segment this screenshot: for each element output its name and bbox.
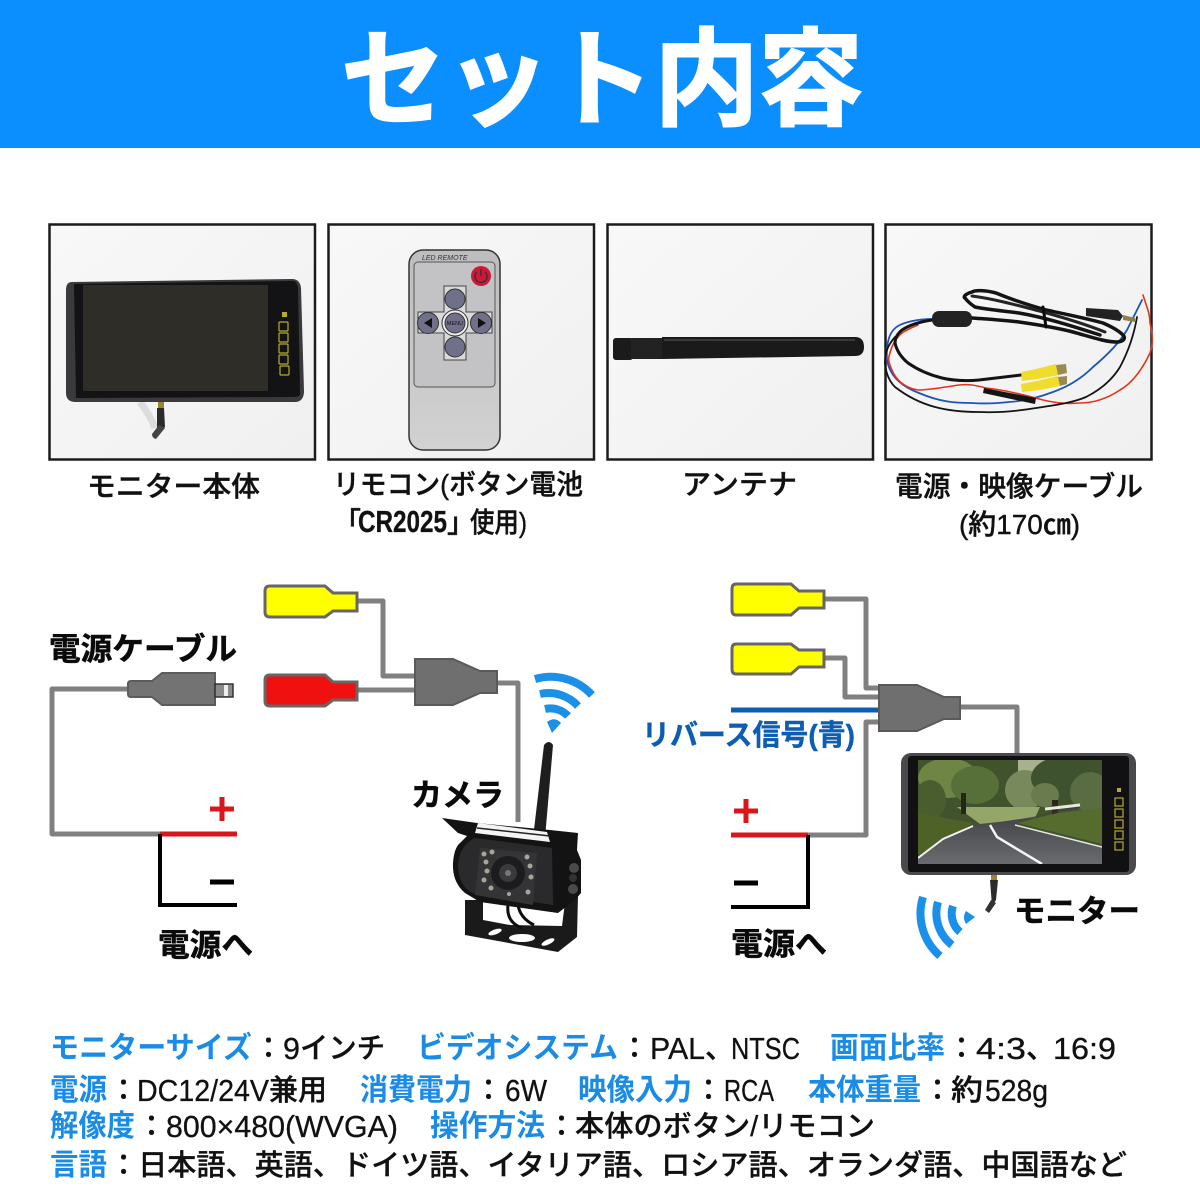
power plug bbox=[128, 673, 233, 705]
spec line 1: PAL bbox=[650, 1031, 705, 1066]
spec line 2: DC12/24V bbox=[137, 1073, 269, 1108]
title banner bbox=[0, 0, 1200, 148]
yellow RCA plug 2 bbox=[732, 644, 824, 674]
spec line 1: モニターサイズ bbox=[50, 1031, 252, 1065]
spec line 2: 本体重量 bbox=[808, 1074, 921, 1107]
icon: cable photo bbox=[885, 291, 1152, 412]
yellow RCA plug bbox=[265, 586, 357, 617]
spec line 1: ： bbox=[620, 1033, 649, 1065]
spec line 2 bbox=[50, 1073, 1048, 1108]
spec line 2: ： bbox=[694, 1075, 723, 1107]
spec line 3: 800×480(WVGA) bbox=[166, 1109, 398, 1144]
caption: remote: CR2025 bbox=[358, 504, 447, 539]
spec line 2: RCA bbox=[724, 1073, 774, 1108]
icon: remote photo: MENU bbox=[447, 321, 463, 327]
wires bbox=[731, 599, 1017, 907]
label: power cable: 電源ケーブル bbox=[49, 632, 237, 667]
icon: monitor photo bbox=[66, 279, 304, 439]
spec line 3: 本体のボタン/リモコン bbox=[575, 1110, 875, 1143]
panel: remote bbox=[328, 224, 594, 539]
spec line 1 bbox=[50, 1031, 1116, 1066]
spec line 2: ： bbox=[923, 1075, 952, 1107]
blue reverse wire bbox=[731, 708, 880, 712]
caption: antenna: アンテナ bbox=[682, 469, 797, 500]
spec line 4: ：日本語、英語、ドイツ語、イタリア語、ロシア語、オランダ語、中国語など bbox=[109, 1149, 1127, 1182]
camera cable loop bbox=[508, 905, 534, 928]
red RCA plug bbox=[265, 675, 357, 706]
diagram: camera wiring bbox=[49, 586, 592, 963]
icon: remote photo: LED REMOTE bbox=[422, 255, 468, 262]
spec line 1: ： bbox=[947, 1033, 976, 1065]
spec line 1: インチ bbox=[300, 1033, 385, 1065]
minus sign bbox=[210, 880, 234, 884]
spec line 2: ： bbox=[109, 1075, 138, 1107]
spec line 1: 9 bbox=[283, 1031, 300, 1066]
camera hood and body bbox=[442, 818, 581, 913]
caption: cable: (約170㎝) bbox=[959, 509, 1080, 540]
spec line 4: 言語 bbox=[50, 1149, 107, 1182]
caption: remote: リモコン(ボタン電池 bbox=[333, 469, 583, 500]
spec line 3: ： bbox=[547, 1111, 576, 1143]
splitter bbox=[879, 685, 960, 731]
splitter bbox=[415, 659, 497, 705]
plus sign bbox=[734, 799, 758, 823]
spec line 3: 操作方法 bbox=[430, 1110, 545, 1143]
label: to power: 電源へ bbox=[731, 927, 827, 962]
spec line 3 bbox=[50, 1109, 875, 1144]
icon: wifi up bbox=[535, 677, 592, 733]
diagram: monitor wiring bbox=[642, 584, 1140, 962]
spec line 1: 16:9 bbox=[1053, 1031, 1116, 1066]
spec line 1: NTSC bbox=[731, 1031, 800, 1066]
camera bracket bbox=[465, 895, 578, 952]
wires bbox=[52, 601, 518, 905]
caption: remote: 使用) bbox=[470, 507, 527, 538]
panel: antenna bbox=[608, 224, 873, 500]
caption: cable bbox=[895, 471, 1143, 540]
icon: camera photo bbox=[442, 742, 581, 952]
label: reverse signal: リバース信号(青) bbox=[642, 719, 855, 752]
icon: antenna photo bbox=[613, 337, 864, 360]
spec line 3: 解像度 bbox=[50, 1110, 135, 1143]
spec line 1: ビデオシステム bbox=[417, 1031, 618, 1065]
spec line 2: 約 bbox=[951, 1074, 983, 1107]
spec line 1: ： bbox=[254, 1033, 283, 1065]
label: monitor: モニター bbox=[1014, 894, 1140, 929]
spec line 1: 、 bbox=[1026, 1033, 1055, 1065]
spec line 3: ： bbox=[137, 1111, 166, 1143]
spec line 2: 電源 bbox=[50, 1074, 107, 1107]
spec line 1: 画面比率 bbox=[830, 1032, 945, 1065]
caption: cable: 電源・映像ケーブル bbox=[895, 471, 1143, 502]
yellow RCA plug 1 bbox=[732, 584, 824, 615]
minus sign bbox=[734, 880, 758, 886]
camera antenna bbox=[533, 742, 553, 838]
caption: monitor: モニター本体 bbox=[87, 471, 260, 502]
spec line 1: 4:3 bbox=[976, 1031, 1026, 1066]
caption: remote bbox=[333, 469, 583, 539]
panel: power and video cable bbox=[885, 224, 1152, 540]
panel: monitor unit bbox=[50, 224, 315, 502]
caption: remote: 」 bbox=[447, 507, 475, 538]
icon: monitor with road photo bbox=[901, 753, 1136, 913]
spec text block bbox=[50, 1031, 1127, 1182]
spec line 2: ： bbox=[474, 1075, 503, 1107]
spec line 2: 消費電力 bbox=[360, 1074, 472, 1107]
plus sign bbox=[210, 797, 234, 821]
label: camera: カメラ bbox=[411, 778, 504, 813]
icon: remote photo bbox=[409, 250, 500, 450]
spec line 2: 528g bbox=[985, 1073, 1048, 1108]
spec line 2: 兼用 bbox=[269, 1074, 327, 1107]
spec line 1: 、 bbox=[705, 1033, 734, 1065]
caption: remote: 「 bbox=[333, 507, 361, 538]
spec line 2: 映像入力 bbox=[578, 1074, 692, 1107]
spec line 2: 6W bbox=[505, 1073, 548, 1108]
label: to power: 電源へ bbox=[158, 928, 253, 963]
icon: wifi left bbox=[921, 897, 975, 956]
camera holes bbox=[488, 927, 555, 947]
title banner: セット内容 bbox=[341, 22, 863, 140]
